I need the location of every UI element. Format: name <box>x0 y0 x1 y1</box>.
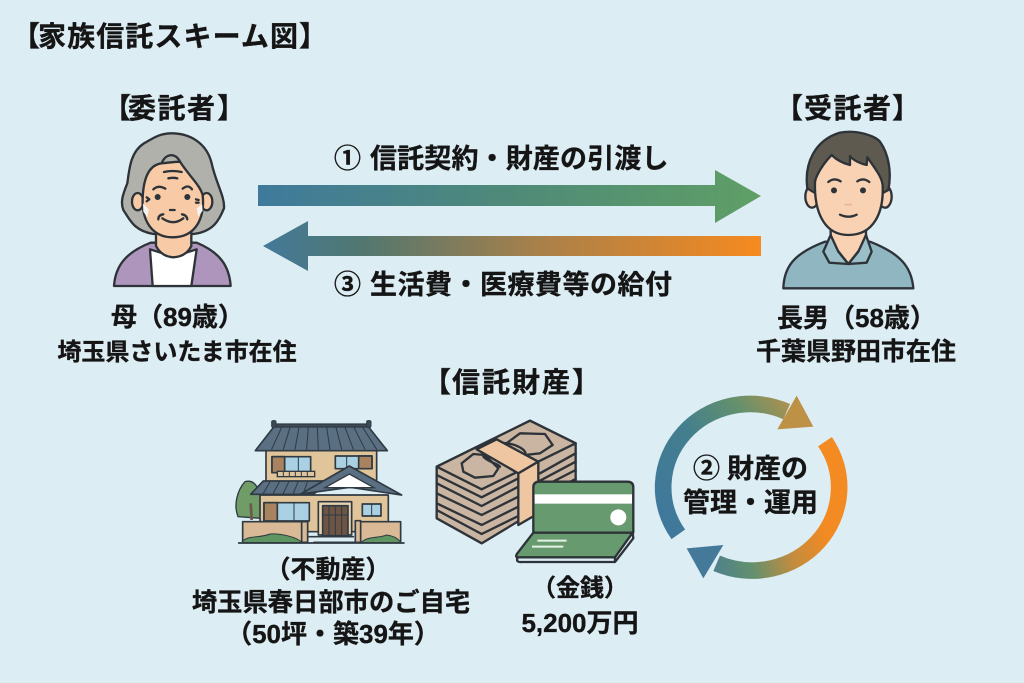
stack edge lines <box>437 453 576 534</box>
shirt <box>783 242 913 288</box>
settlor details <box>57 302 297 366</box>
icon: bank card <box>516 482 633 562</box>
cycle label: 財産の <box>727 454 808 484</box>
neck <box>156 232 191 257</box>
icon: eldest son <box>783 132 913 288</box>
card back <box>533 482 633 533</box>
heading: trust assets: 】 <box>572 367 600 398</box>
asset label: cash <box>521 575 639 638</box>
cycle label: ② <box>693 454 720 484</box>
magnetic stripe <box>535 494 632 504</box>
dot <box>610 509 626 525</box>
face <box>815 155 883 235</box>
heading: trustee: 】 <box>892 93 920 124</box>
label: step 3: ③ <box>334 270 361 300</box>
small window <box>362 504 381 516</box>
sliding window <box>264 503 309 521</box>
heading: settlor <box>103 93 245 124</box>
cardigan <box>114 243 231 286</box>
trustee details: 千葉県野田市在住 <box>756 338 956 366</box>
title: 家族信託スキーム図 <box>38 21 299 52</box>
lower card <box>516 533 633 557</box>
asset label: cash: 5,200万円 <box>521 608 639 638</box>
upper walls <box>266 450 377 483</box>
fence <box>243 522 308 542</box>
cycle label <box>683 454 818 518</box>
upper windows <box>272 457 311 473</box>
label: step 1: 信託契約・財産の引渡し <box>370 144 669 174</box>
settlor details: 母（89歳） <box>111 302 244 332</box>
settlor details: 埼玉県さいたま市在住 <box>57 339 297 366</box>
heading: trust assets <box>423 367 600 398</box>
face <box>143 162 203 237</box>
title: 【 <box>12 21 40 52</box>
tree <box>236 481 261 518</box>
heading: settlor: 委託者 <box>128 93 217 124</box>
paper band top <box>477 439 538 473</box>
heading: trust assets: 信託財産 <box>452 367 572 398</box>
fringe <box>162 155 180 163</box>
asset label: real estate: 埼玉県春日部市のご自宅 <box>192 588 470 617</box>
shrubs <box>242 534 302 543</box>
ears <box>132 193 143 210</box>
arrow 1: transfer <box>258 170 761 223</box>
heading: settlor: 【 <box>103 93 131 124</box>
engraved ovals <box>462 433 553 478</box>
stack body <box>437 421 576 543</box>
trustee details <box>756 303 956 366</box>
label: step 3: 生活費・医療費等の給付 <box>370 270 672 300</box>
neck <box>831 227 866 264</box>
balcony railing <box>277 471 315 477</box>
lower arc <box>687 442 839 578</box>
face lines <box>153 171 192 189</box>
collar <box>823 235 872 264</box>
gable <box>301 466 402 495</box>
paper band side <box>518 462 538 525</box>
title: 】 <box>299 21 327 52</box>
heading: trust assets: 【 <box>423 367 451 398</box>
icon: elderly mother <box>114 133 231 286</box>
icon: house <box>236 421 404 543</box>
eyes and mouth <box>828 179 869 217</box>
upper arc <box>663 396 813 534</box>
asset label: real estate <box>192 556 470 649</box>
hair highlights <box>143 203 149 217</box>
heading: trustee: 受託者 <box>804 93 893 124</box>
top note <box>437 421 576 489</box>
heading: trustee <box>775 93 920 124</box>
hair <box>807 132 890 200</box>
asset label: real estate: （不動産） <box>265 556 391 584</box>
porch door <box>318 502 352 535</box>
lower walls <box>260 495 388 532</box>
hair <box>122 133 224 234</box>
ears <box>805 186 819 208</box>
heading: trustee: 【 <box>775 93 803 124</box>
shirt <box>150 249 197 286</box>
asset label: real estate: （50坪・築39年） <box>226 619 440 649</box>
label: step 1: ① <box>334 144 361 174</box>
lower roof <box>251 481 330 494</box>
asset label: cash: （金銭） <box>532 575 628 602</box>
cycle arrows: management <box>663 396 839 578</box>
heading: settlor: 】 <box>217 93 245 124</box>
trustee details: 長男（58歳） <box>777 303 936 333</box>
arrow 3: benefits <box>263 221 761 271</box>
main roof <box>255 427 387 451</box>
icon: stack of cash <box>437 421 576 543</box>
cycle label: 管理・運用 <box>683 488 818 518</box>
steps and ground <box>239 537 404 543</box>
